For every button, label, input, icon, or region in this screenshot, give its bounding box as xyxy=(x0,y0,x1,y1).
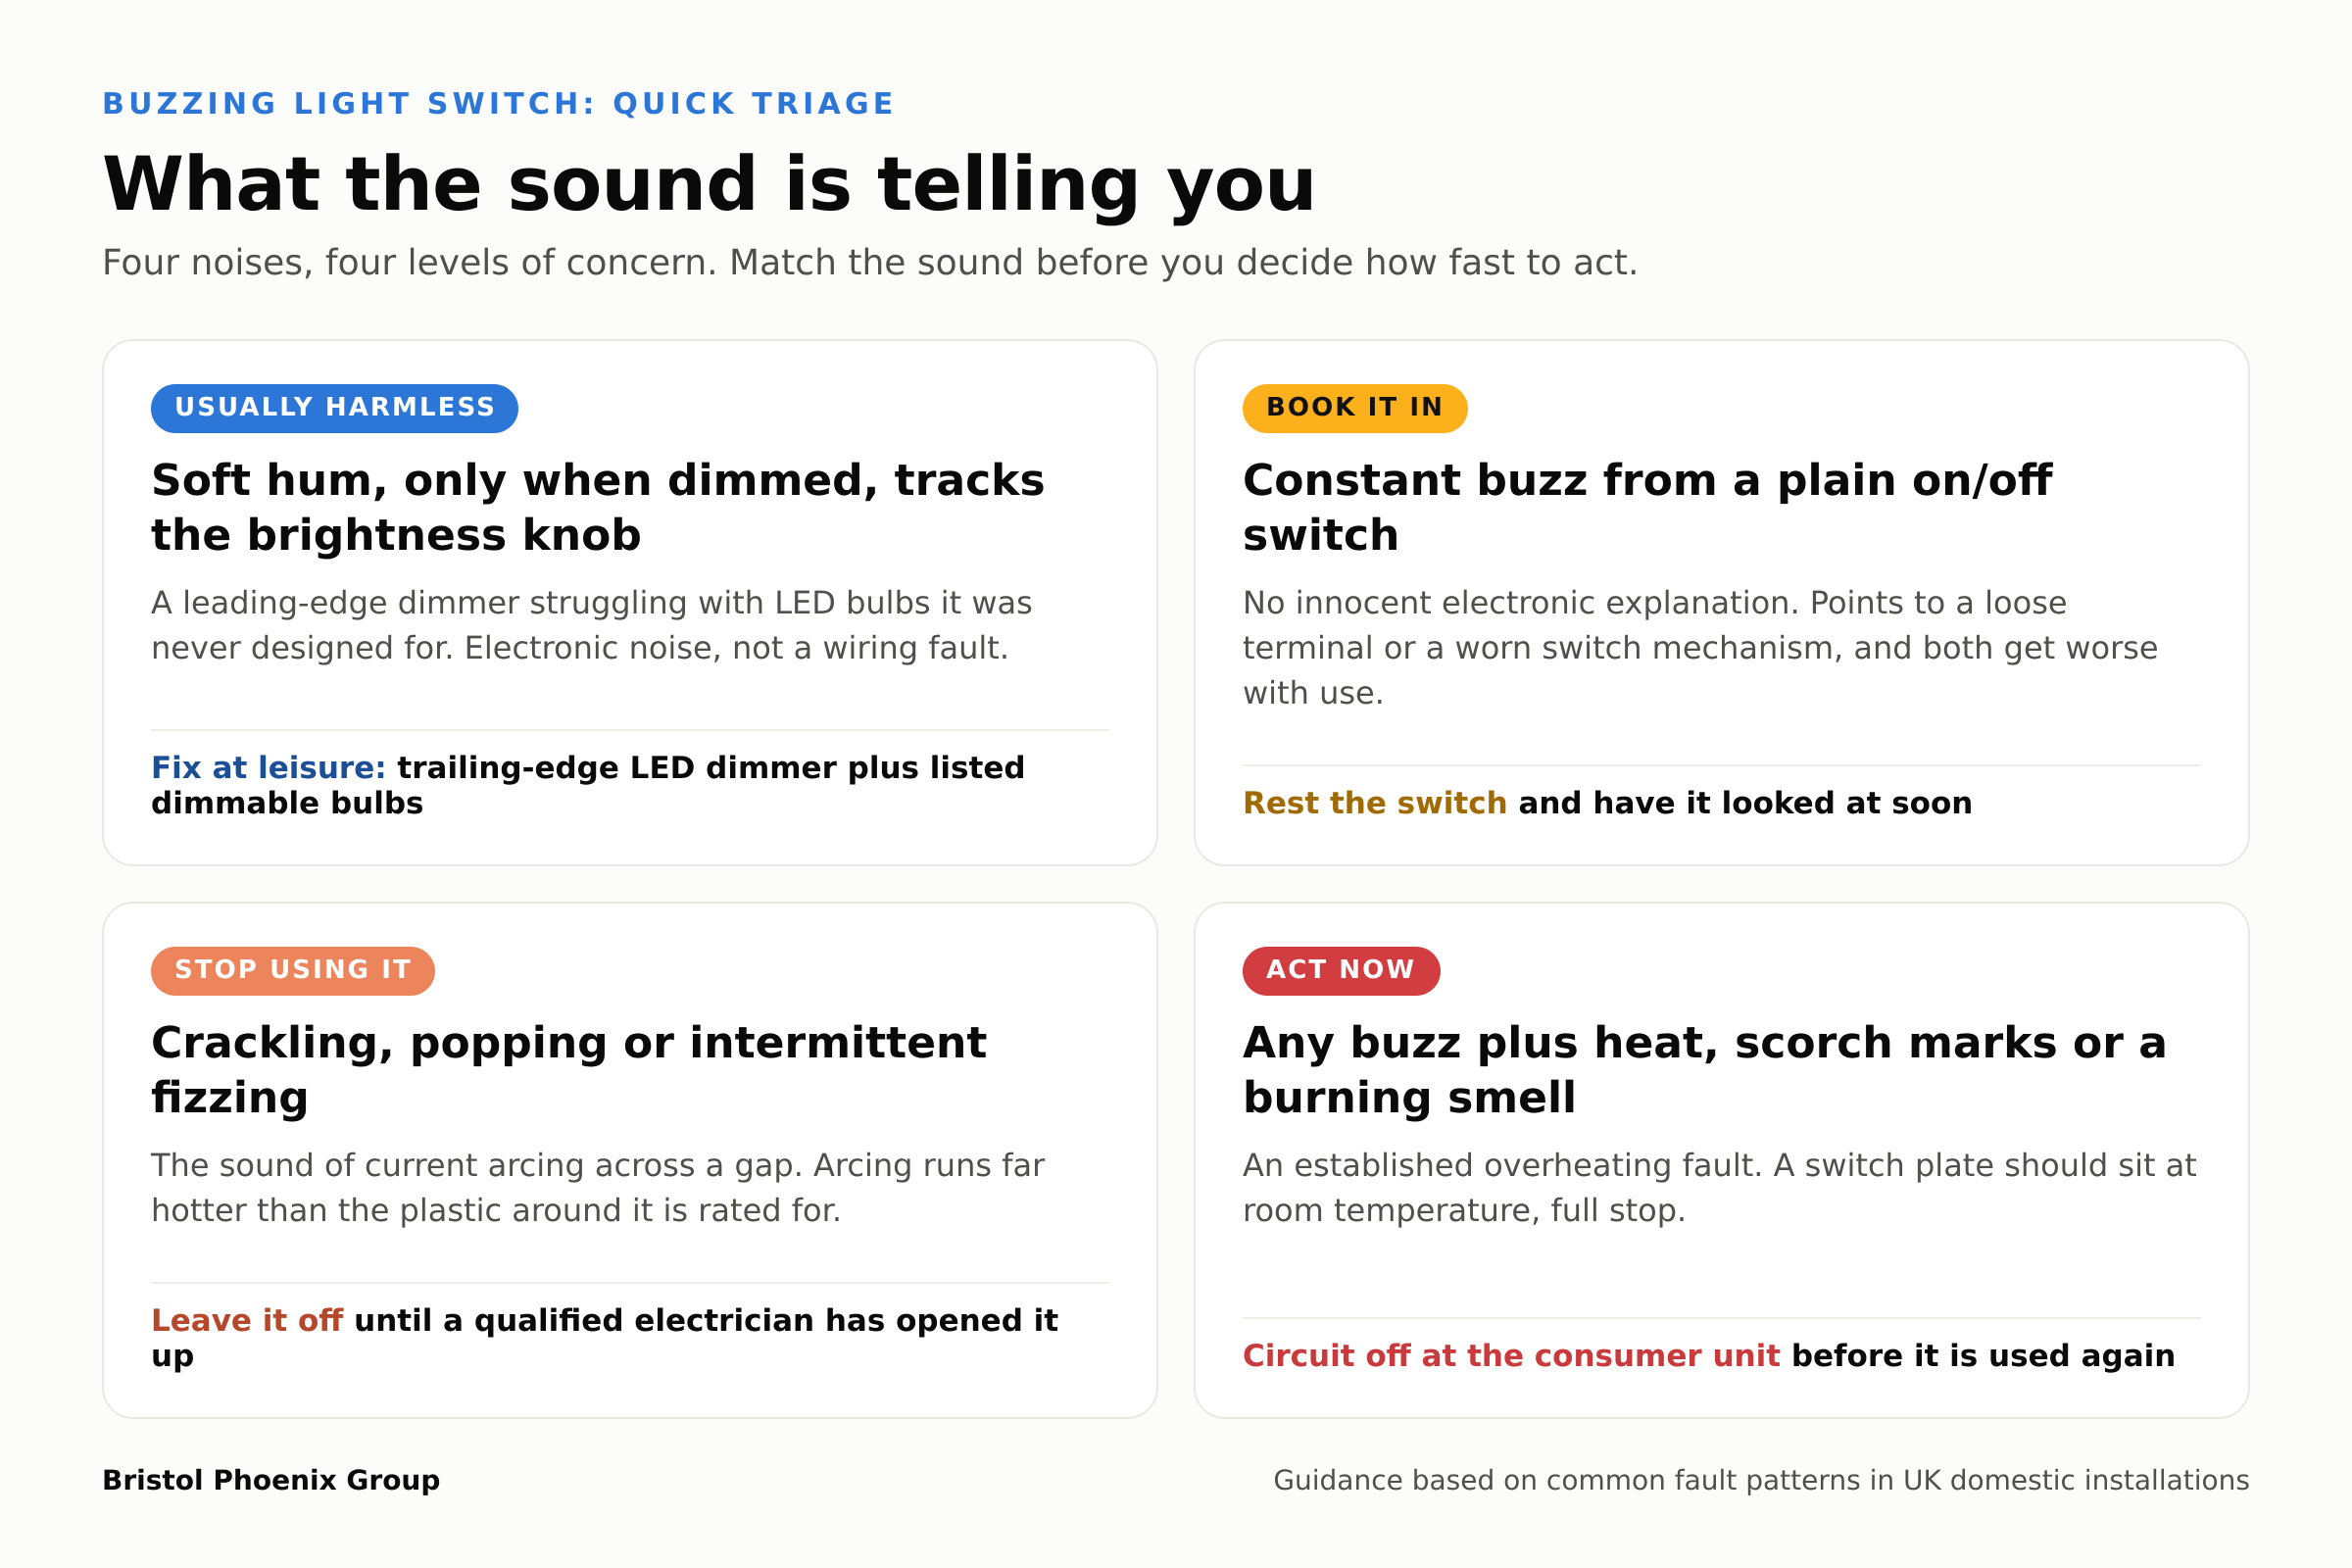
badge: book it in xyxy=(1243,384,1468,433)
panel: usually harmless xyxy=(102,339,1158,866)
subtitle: Four noises, four levels of concern. Match the sound before you decide how fast to act. xyxy=(102,243,1639,283)
panel: book it in xyxy=(1194,339,2250,866)
title: What the sound is telling you xyxy=(102,140,1317,227)
action: circuit off: Circuit off at the consumer unit before it is used again xyxy=(1243,1339,2176,1374)
badge: act now: ACT NOW xyxy=(1266,956,1416,985)
card description: crackling: The sound of current arcing across a gap. Arcing runs far hotter than the plastic around it is rated for. xyxy=(151,1147,1045,1229)
footer: organisation: Bristol Phoenix Group xyxy=(102,1464,440,1496)
action: rest the switch: Rest the switch and have it looked at soon xyxy=(1243,786,1973,821)
action: leave it off: Leave it off until a qualified electrician has opened it up xyxy=(151,1303,1058,1374)
card heading: crackling: Crackling, popping or intermittent fizzing xyxy=(151,1018,987,1123)
card description: constant buzz: No innocent electronic explanation. Points to a loose terminal or a worn switch mechanism, and both get worse with use. xyxy=(1243,584,2159,711)
panel: act now xyxy=(1194,902,2250,1419)
panel: stop using it xyxy=(102,902,1158,1419)
badge: stop using it: STOP USING IT xyxy=(174,956,413,985)
card heading: soft hum: Soft hum, only when dimmed, tracks the brightness knob xyxy=(151,456,1046,561)
badge: stop using it xyxy=(151,947,435,996)
card heading: constant buzz: Constant buzz from a plain on/off switch xyxy=(1243,456,2053,561)
card description: buzz plus heat: An established overheating fault. A switch plate should sit at room temperature, full stop. xyxy=(1243,1147,2197,1229)
card heading: buzz plus heat: Any buzz plus heat, scorch marks or a burning smell xyxy=(1243,1018,2168,1123)
badge: usually harmless xyxy=(151,384,518,433)
card description: soft hum: A leading-edge dimmer struggling with LED bulbs it was never designed for. Electronic noise, not a wiring fault. xyxy=(151,584,1033,666)
badge: book it in: BOOK IT IN xyxy=(1266,393,1445,422)
badge: act now xyxy=(1243,947,1441,996)
action: fix at leisure: Fix at leisure: trailing-edge LED dimmer plus listed dimmable bulbs xyxy=(151,751,1026,821)
badge: usually harmless: USUALLY HARMLESS xyxy=(174,393,497,422)
eyebrow: BUZZING LIGHT SWITCH: QUICK TRIAGE xyxy=(102,87,897,122)
footer: source note: Guidance based on common fault patterns in UK domestic installations xyxy=(1273,1464,2250,1496)
